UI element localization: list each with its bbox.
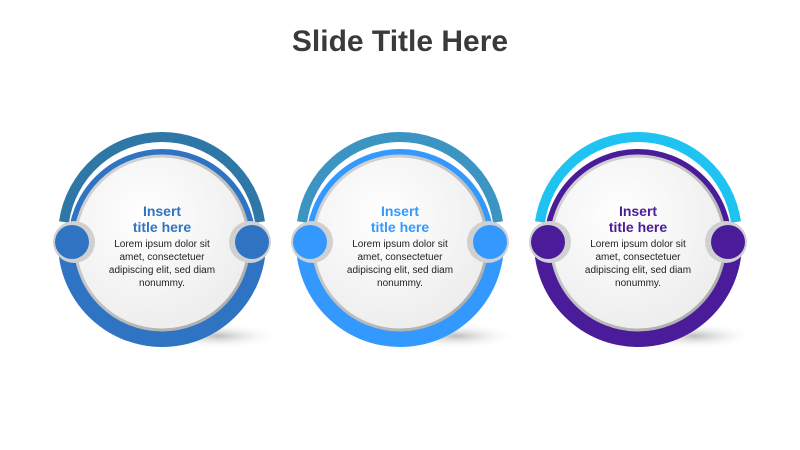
text: step 2: Lorem ipsum dolor sit amet, consectetuer adipiscing elit, sed diam nonummy. — [347, 239, 453, 289]
text: step 1 — [109, 203, 215, 289]
icon: left node — [55, 225, 89, 259]
panel: step 2 — [291, 130, 518, 349]
title: Slide Title Here — [292, 25, 508, 58]
text: step 2: Insert — [381, 203, 419, 219]
panel: step 3 — [529, 130, 756, 349]
icon: right node — [711, 225, 745, 259]
icon: left node — [293, 225, 327, 259]
icon: right node — [473, 225, 507, 259]
text: step 2: title here — [371, 219, 429, 235]
text: step 1: title here — [133, 219, 191, 235]
text: step 3: Lorem ipsum dolor sit amet, consectetuer adipiscing elit, sed diam nonummy. — [585, 239, 691, 289]
text: step 3: title here — [609, 219, 667, 235]
panel: step 1 — [53, 130, 280, 349]
text: step 1: Lorem ipsum dolor sit amet, consectetuer adipiscing elit, sed diam nonummy. — [109, 239, 215, 289]
icon: right node — [235, 225, 269, 259]
text: step 3: Insert — [619, 203, 657, 219]
icon: left node — [531, 225, 565, 259]
text: step 2 — [347, 203, 453, 289]
text: step 1: Insert — [143, 203, 181, 219]
text: step 3 — [585, 203, 691, 289]
